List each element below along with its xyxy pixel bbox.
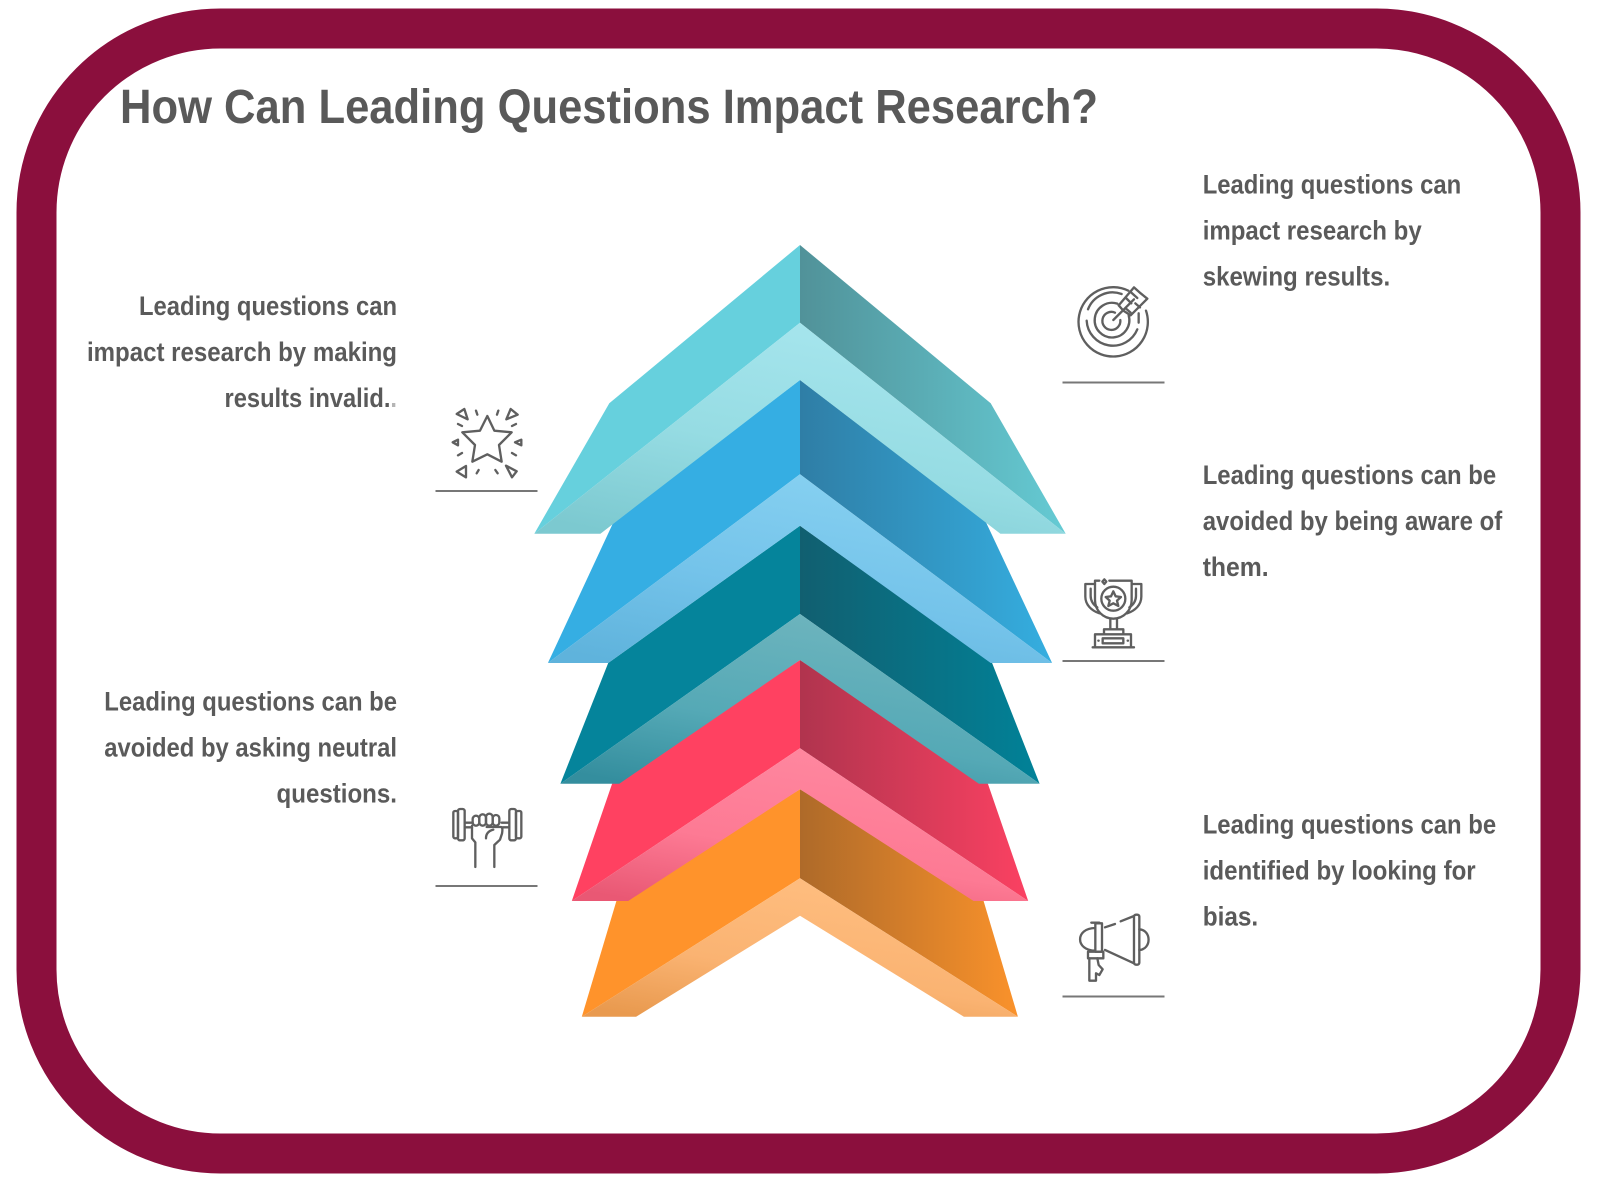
divider line: star [436, 490, 538, 492]
icon: star with sparkles [453, 409, 521, 477]
chevron stack [534, 245, 1066, 1017]
text: being aware [1203, 460, 1502, 582]
divider line: trophy [1062, 660, 1164, 662]
text: looking for bias: Leading questions can be [1203, 810, 1496, 840]
text: skewing results: skewing results. [1203, 262, 1390, 292]
text: results invalid: impact research by making [87, 337, 397, 367]
chevron 5: orange [582, 789, 1018, 1017]
icon: target with arrow [1079, 287, 1148, 357]
text: neutral questions: Leading questions can be [104, 686, 397, 716]
chevron 4: red [572, 660, 1028, 901]
text: results invalid: Leading questions can [139, 291, 397, 321]
text: looking for bias: bias. [1203, 902, 1258, 932]
divider line: dumbbell [436, 885, 538, 887]
chevron 1: light cyan [534, 245, 1066, 534]
title: How Can Leading Questions Impact Research? [120, 80, 1098, 134]
text: skewing results: impact research by [1203, 216, 1422, 246]
divider line: target [1062, 382, 1164, 384]
text: neutral questions [104, 686, 397, 808]
text: being aware: them. [1203, 552, 1269, 582]
text: neutral questions: questions. [276, 778, 397, 808]
chevron 2: blue [548, 380, 1052, 663]
text: looking for bias [1203, 810, 1496, 932]
icon: megaphone [1080, 915, 1149, 981]
text: results invalid: results invalid.. [224, 383, 397, 413]
text: skewing results: Leading questions can [1203, 170, 1461, 200]
icon: trophy [1085, 579, 1141, 647]
text: skewing results [1203, 170, 1461, 292]
chevron 3: teal [560, 526, 1040, 784]
text: being aware: avoided by being aware of [1203, 506, 1502, 536]
text: being aware: Leading questions can be [1203, 460, 1496, 490]
text: looking for bias: identified by looking for [1203, 856, 1476, 886]
divider line: megaphone [1062, 996, 1164, 998]
text: neutral questions: avoided by asking neutral [104, 732, 397, 762]
text: results invalid [87, 291, 397, 413]
icon: fist with dumbbell [453, 809, 521, 867]
